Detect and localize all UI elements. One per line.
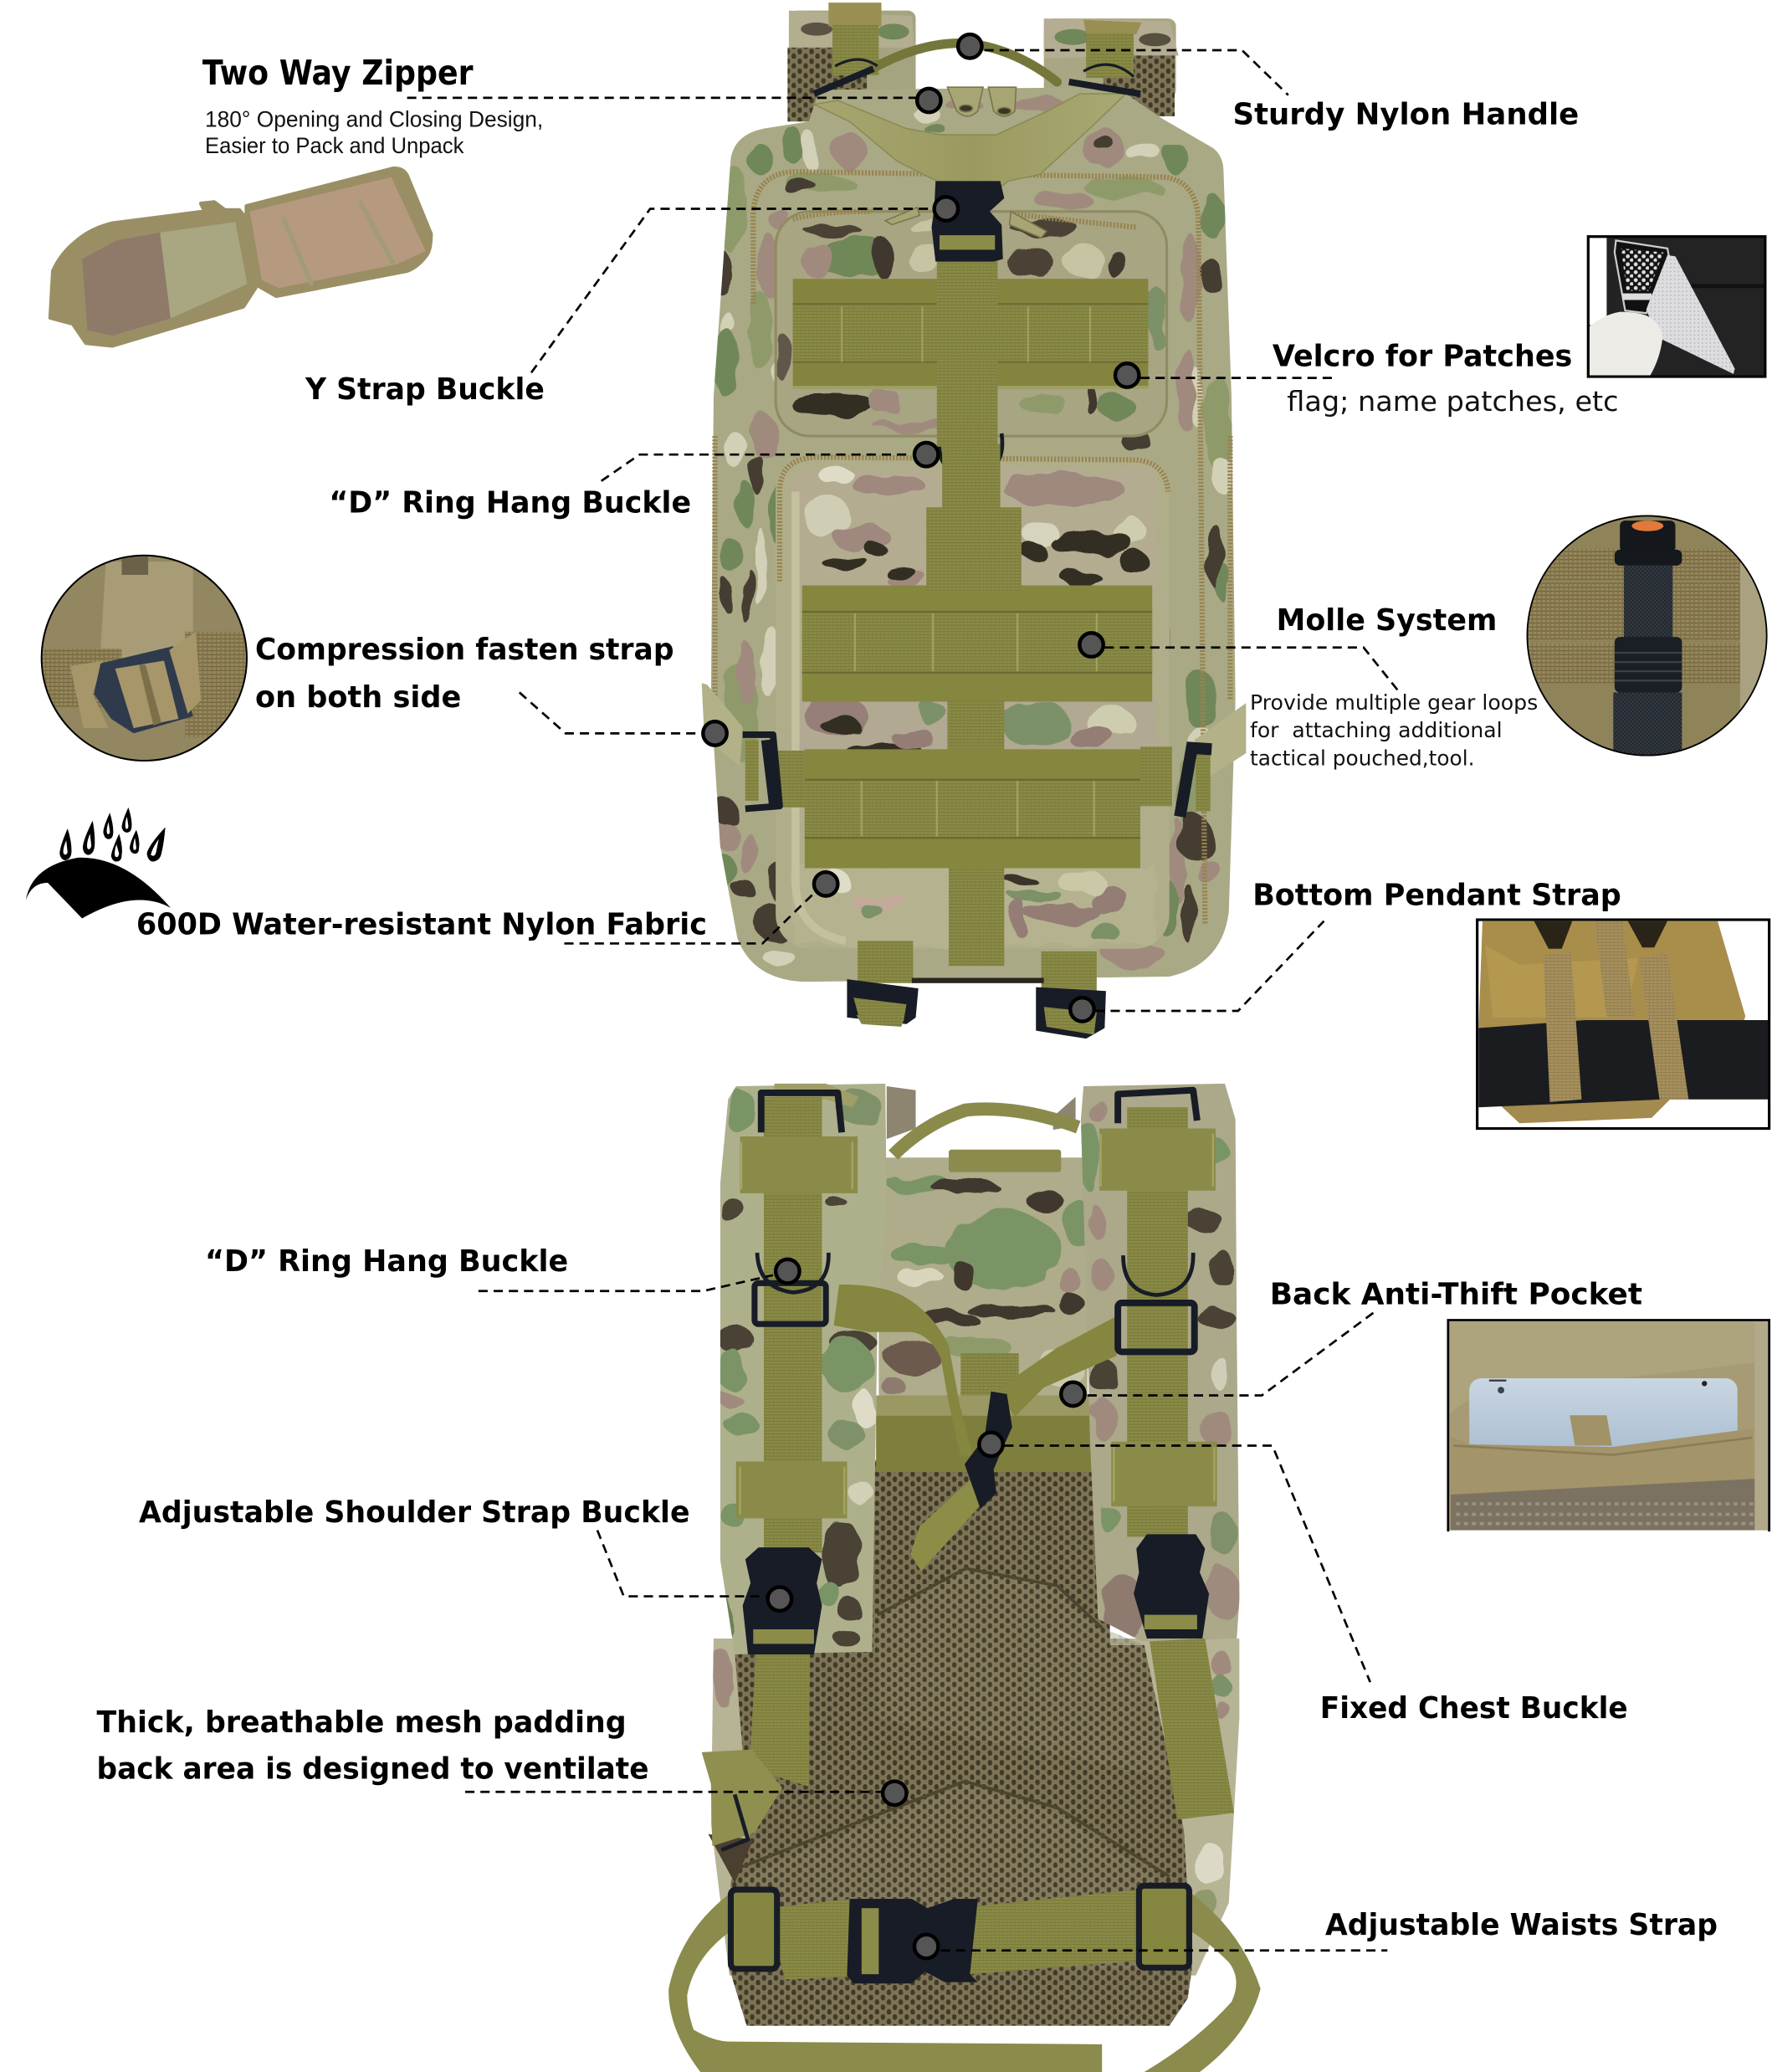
zipper pulls (885, 87, 1047, 238)
back top handle (887, 1086, 1078, 1172)
heading: velcro for patches: Velcro for Patches (1273, 339, 1572, 373)
lower pocket (776, 457, 1170, 949)
inset: open bag (50, 168, 431, 346)
top handle (872, 44, 1057, 82)
left shoulder pad (714, 1077, 892, 1659)
text: zipper description: 180° Opening and Closing Design, (205, 107, 543, 132)
heading: compression strap: Compression fasten strap (255, 633, 674, 667)
vertical webbing straps (926, 259, 1022, 966)
inset: compression strap circle (40, 555, 251, 767)
left strap assembly (702, 1084, 859, 1850)
top D-ring sliders (814, 59, 1140, 94)
callout marker dots (703, 34, 1139, 1958)
side compression straps (702, 683, 1246, 817)
loose chest straps and buckle (834, 1285, 1195, 1572)
back middle panel (878, 1157, 1090, 1401)
icon: rain and water-resistant fabric (26, 808, 171, 918)
inset: back anti-theft pocket photo (1448, 1321, 1769, 1533)
chest band (876, 1396, 1092, 1472)
y strap (814, 94, 1126, 187)
heading: mesh padding: back area is designed to ventilate (96, 1751, 649, 1786)
molle band lower (805, 749, 1140, 868)
heading: bottom pendant strap: Bottom Pendant Strap (1252, 879, 1621, 913)
top webbing panel (793, 279, 1148, 389)
heading: front d ring: “D” Ring Hang Buckle (329, 486, 691, 521)
text: molle description: tactical pouched,tool. (1250, 746, 1474, 770)
top pocket (775, 212, 1167, 436)
back backpack (668, 1077, 1261, 2072)
heading: sturdy nylon handle: Sturdy Nylon Handle (1233, 97, 1579, 131)
inset: molle flashlight circle (1526, 515, 1770, 758)
inset: bottom pendant strap photo (1478, 920, 1770, 1129)
back mesh padding (709, 1460, 1192, 2026)
heading: back pocket: Back Anti-Thift Pocket (1270, 1278, 1642, 1312)
y strap buckle (931, 181, 1004, 262)
right strap assembly (1099, 1090, 1234, 1819)
text: molle description: for attaching additional (1250, 718, 1503, 742)
heading: compression strap (255, 633, 674, 715)
text: molle description: Provide multiple gear loops (1250, 690, 1538, 715)
heading: two way zipper: Two Way Zipper (202, 53, 474, 93)
heading: molle system: Molle System (1277, 603, 1497, 638)
front backpack (700, 3, 1255, 1039)
back lower body (700, 1639, 1242, 1982)
waist strap (668, 1885, 1261, 2072)
text: zipper description (205, 107, 543, 158)
inset: velcro patch photo (1588, 237, 1765, 377)
heading: y strap buckle: Y Strap Buckle (305, 372, 545, 407)
heading: mesh padding (96, 1705, 649, 1786)
heading: back d ring: “D” Ring Hang Buckle (205, 1244, 568, 1279)
text: zipper description: Easier to Pack and Unpack (205, 133, 464, 158)
heading: mesh padding: Thick, breathable mesh padding (96, 1705, 627, 1740)
front D ring (940, 433, 1002, 475)
heading: nylon fabric: 600D Water-resistant Nylon Fabric (136, 907, 707, 941)
bottom pendant straps (847, 941, 1106, 1039)
right shoulder pad (1081, 1084, 1240, 1641)
backpack body with camouflage (700, 79, 1255, 991)
molle band upper (802, 586, 1152, 701)
heading: chest buckle: Fixed Chest Buckle (1320, 1691, 1628, 1726)
heading: shoulder buckle: Adjustable Shoulder Strap Buckle (139, 1495, 690, 1530)
text: molle description (1250, 690, 1538, 770)
callout lines (407, 50, 1401, 1951)
outer pocket zipper (715, 172, 1230, 925)
heading: waist strap: Adjustable Waists Strap (1325, 1908, 1718, 1942)
text: velcro description: flag; name patches, etc (1287, 385, 1619, 418)
heading: compression strap: on both side (255, 680, 461, 715)
rear shoulder pads and straps (787, 3, 1179, 121)
